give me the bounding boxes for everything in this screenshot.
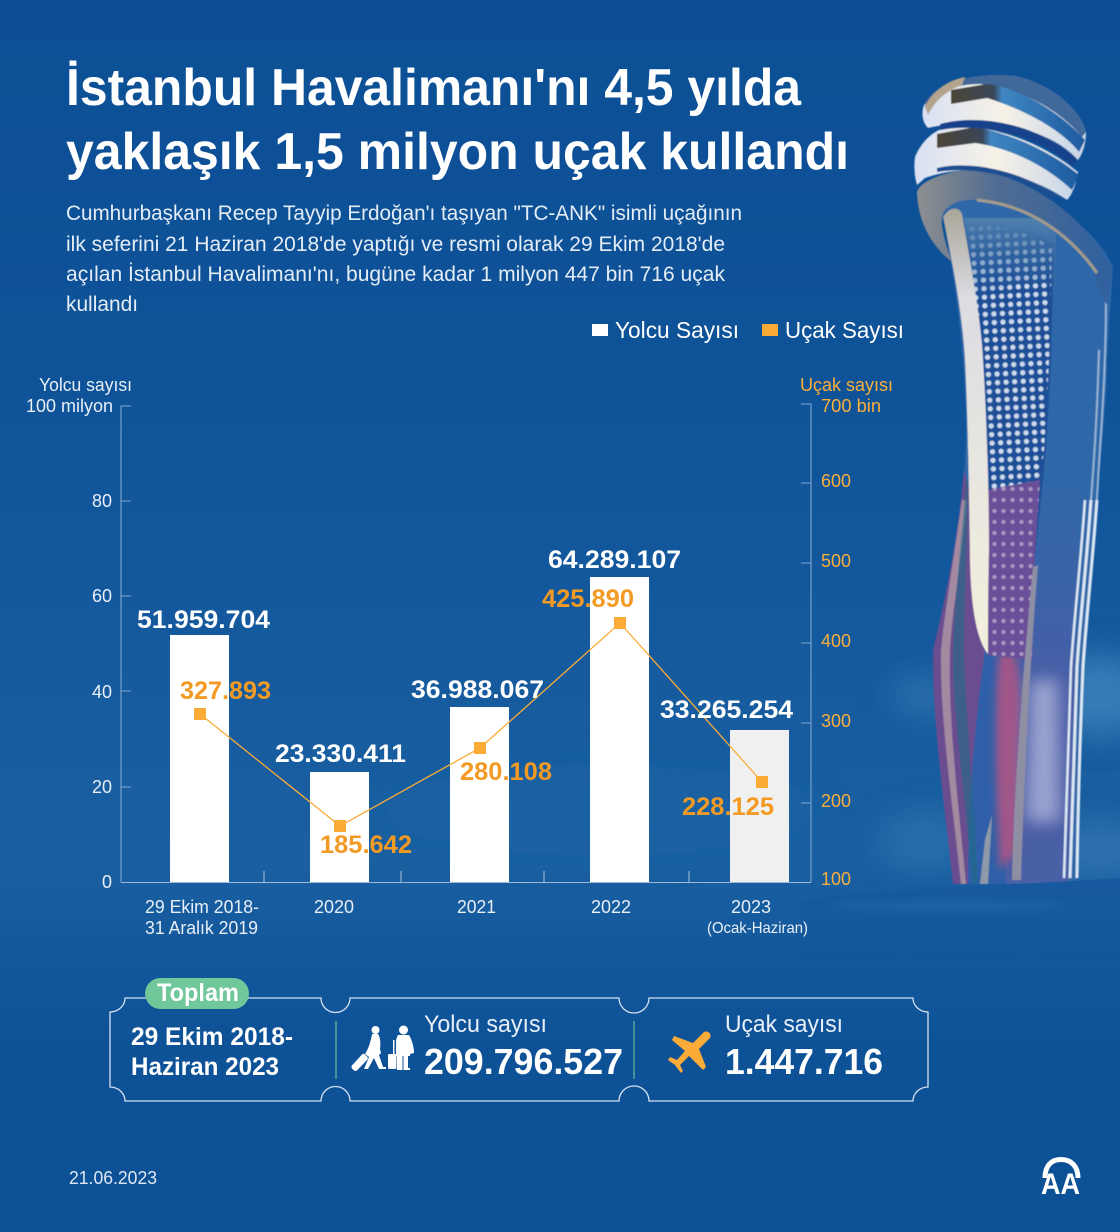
collar [917,170,1113,305]
illustration: airport control tower [800,75,1120,960]
left axis: passengers [26,375,132,892]
date: 21.06.2023 [69,1168,157,1188]
period: 29 Ekim 2018- [131,1023,293,1051]
left axis: passengers: 40 [92,682,112,702]
passenger value labels [137,546,793,768]
passenger value labels: 51.959.704 [137,606,270,634]
passenger value labels: 64.289.107 [548,546,681,574]
right axis: aircraft: 300 [821,711,851,731]
passenger total: 209.796.527 [424,1041,623,1082]
white strip [943,209,989,654]
x axis labels: (Ocak-Haziran) [707,920,808,937]
left axis: passengers: 100 milyon [26,396,113,416]
x axis labels: 2020 [314,897,354,917]
upper ring [923,75,1086,160]
legend [592,317,904,343]
aircraft total [725,1011,883,1082]
aircraft total: 1.447.716 [725,1041,883,1082]
x axis labels [145,897,808,938]
aircraft value labels: 185.642 [320,831,412,859]
aircraft value labels [180,585,774,859]
aircraft value labels: 425.890 [542,585,634,613]
aircraft value labels: 280.108 [460,758,552,786]
right axis: aircraft: 500 [821,551,851,571]
icon: passengers [352,1026,414,1071]
right axis: aircraft: 100 [821,869,851,889]
x axis labels: 2022 [591,897,631,917]
left axis: passengers: 20 [92,777,112,797]
period [131,1023,293,1081]
left axis: passengers: Yolcu sayısı [39,375,132,395]
passenger total: Yolcu sayısı [424,1011,547,1038]
left axis: passengers: 60 [92,586,112,606]
bar chart: passengers [121,577,811,882]
right axis: aircraft: 600 [821,471,851,491]
passenger value labels: 33.265.254 [660,696,793,724]
right axis: aircraft: 200 [821,791,851,811]
lower ring [914,127,1078,200]
right axis: aircraft: 400 [821,631,851,651]
left axis: passengers: 80 [92,491,112,511]
passenger total [424,1011,623,1082]
left axis: passengers: 0 [102,872,112,892]
aircraft value labels: 327.893 [180,677,271,705]
x axis labels: 29 Ekim 2018- [145,897,259,917]
subtitle text block: Cumhurbaşkanı Recep Tayyip Erdoğan'ı taşıyan "TC-ANK" isimli uçağının [66,202,742,225]
white lines on right edge [1064,300,1106,878]
subtitle text block: kullandı [66,293,138,316]
x axis labels: 2023 [731,897,771,917]
legend: Yolcu Sayısı [615,317,739,343]
right axis: aircraft: 700 bin [821,396,881,416]
aircraft total: Uçak sayısı [725,1011,843,1038]
logo: Anadolu Agency: AA [1041,1168,1080,1201]
aircraft value labels: 228.125 [682,793,774,821]
shaft base [933,170,1113,884]
passenger value labels: 36.988.067 [411,676,544,704]
tan strip [1012,565,1038,880]
subtitle text block: açılan İstanbul Havalimanı'nı, bugüne kadar 1 milyon 447 bin 716 uçak [66,263,725,286]
line chart: aircraft [194,617,768,832]
subtitle text block: ilk seferini 21 Haziran 2018'de yaptığı ve resmi olarak 29 Ekim 2018'de [66,233,725,256]
panel: totals ticket [110,978,928,1101]
ground [800,878,1120,960]
passenger value labels: 23.330.411 [275,740,406,768]
subtitle text block [66,202,742,316]
icon: plane [668,1031,711,1073]
dotted facade [964,221,1054,660]
title: İstanbul Havalimanı'nı 4,5 yılda [66,59,802,117]
x axis labels: 31 Aralık 2019 [145,918,258,938]
period: Haziran 2023 [131,1053,279,1081]
title: yaklaşık 1,5 milyon uçak kullandı [66,123,849,181]
lower shaft colour bands [933,470,1000,884]
right axis: aircraft: Uçak sayısı [800,375,893,395]
badge: Toplam: Toplam [157,979,239,1007]
x axis labels: 2021 [457,897,496,917]
title [66,59,849,181]
legend: Uçak Sayısı [785,317,904,343]
right axis: aircraft [800,375,893,889]
